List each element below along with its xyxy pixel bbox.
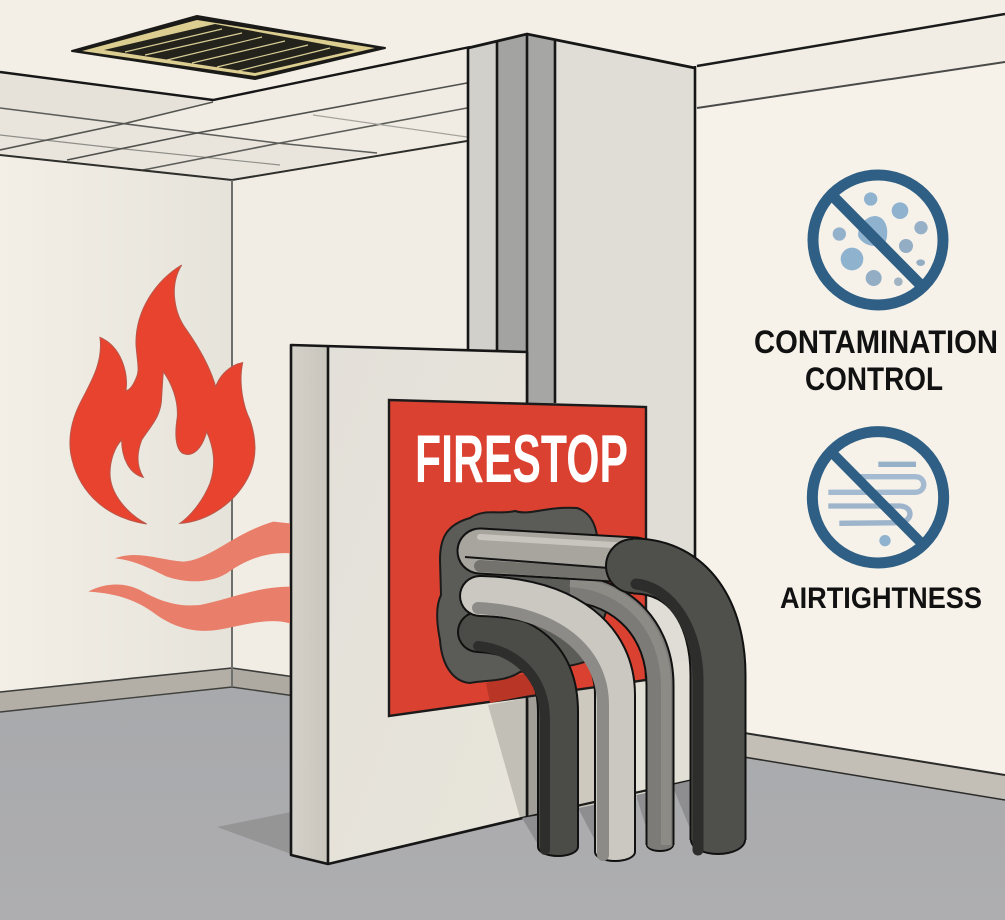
pipe: light silver	[459, 575, 636, 862]
floor shadow	[217, 812, 291, 854]
pipe: polished top	[465, 537, 635, 576]
pipe: large dark	[605, 538, 746, 855]
firestop label: FIRESTOP	[415, 421, 628, 497]
red firestop panel	[389, 400, 646, 716]
label: contamination control: CONTROL	[805, 361, 943, 397]
suspended ceiling tile grid	[0, 47, 470, 687]
floor shadows from pipes	[522, 780, 694, 848]
heat wave lower	[88, 585, 290, 631]
baseboards	[0, 668, 1005, 800]
flame icon	[70, 265, 255, 524]
pipe: mid grey	[570, 582, 674, 852]
sealant around pipes	[437, 508, 610, 683]
heat wave upper	[115, 522, 290, 581]
wall block	[291, 345, 527, 864]
heat waves	[88, 522, 290, 631]
right wall	[695, 14, 1005, 775]
label: contamination control	[754, 324, 998, 397]
left wall	[0, 155, 232, 712]
floor	[0, 687, 1005, 920]
label: airtightness: AIRTIGHTNESS	[780, 582, 982, 615]
icon: no air leakage	[812, 432, 944, 563]
structural column	[468, 34, 695, 817]
ceiling vent	[72, 16, 385, 79]
middle wall	[232, 141, 468, 720]
icon: no contamination	[813, 175, 943, 305]
pipes	[457, 537, 746, 862]
pipe: dark lower	[457, 611, 579, 857]
